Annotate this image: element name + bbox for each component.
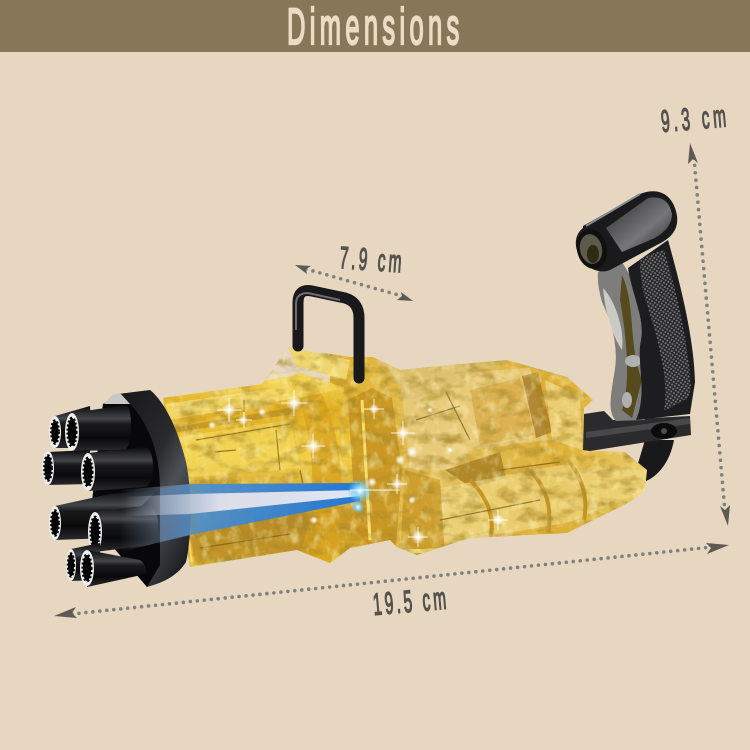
nozzle 4 [88, 447, 153, 491]
label: 19.5 cm: 19.5 cm [372, 582, 450, 623]
product: bubble gun [42, 191, 695, 587]
grip bracket [583, 411, 691, 451]
water jet beam [120, 478, 373, 552]
nozzle 1 [55, 406, 92, 448]
front barrel body [160, 375, 372, 570]
label: 7.9 cm: 7.9 cm [338, 242, 406, 280]
label: 9.3 cm: 9.3 cm [660, 100, 731, 140]
checkered panel [640, 250, 691, 411]
nozzle 6 [95, 505, 158, 552]
nozzle 8 [87, 550, 146, 587]
carry handle [296, 290, 359, 378]
grip black body [628, 240, 695, 420]
arrow: depth dimension [295, 265, 413, 301]
arrow: length dimension [54, 543, 729, 618]
nozzle 7 [71, 543, 100, 581]
front flange [90, 390, 190, 587]
grip inner translucent side [598, 262, 645, 421]
sparkles [208, 390, 508, 547]
grip rear wheel [636, 440, 674, 481]
pistol grip [573, 191, 695, 421]
grip end cap [573, 226, 611, 272]
body details [165, 347, 646, 565]
nozzle 3 [48, 450, 90, 485]
grip top cylinder [576, 191, 677, 271]
flange inner face [90, 404, 160, 587]
arrow: height dimension [688, 143, 730, 526]
nozzle 2 [72, 405, 131, 451]
translucent texture [164, 352, 646, 567]
rear barrel body [330, 354, 647, 563]
title: Dimensions [287, 0, 464, 55]
header band [0, 0, 750, 52]
yellow body [160, 340, 660, 570]
nozzle 5 [55, 490, 157, 540]
nozzles [42, 405, 158, 587]
